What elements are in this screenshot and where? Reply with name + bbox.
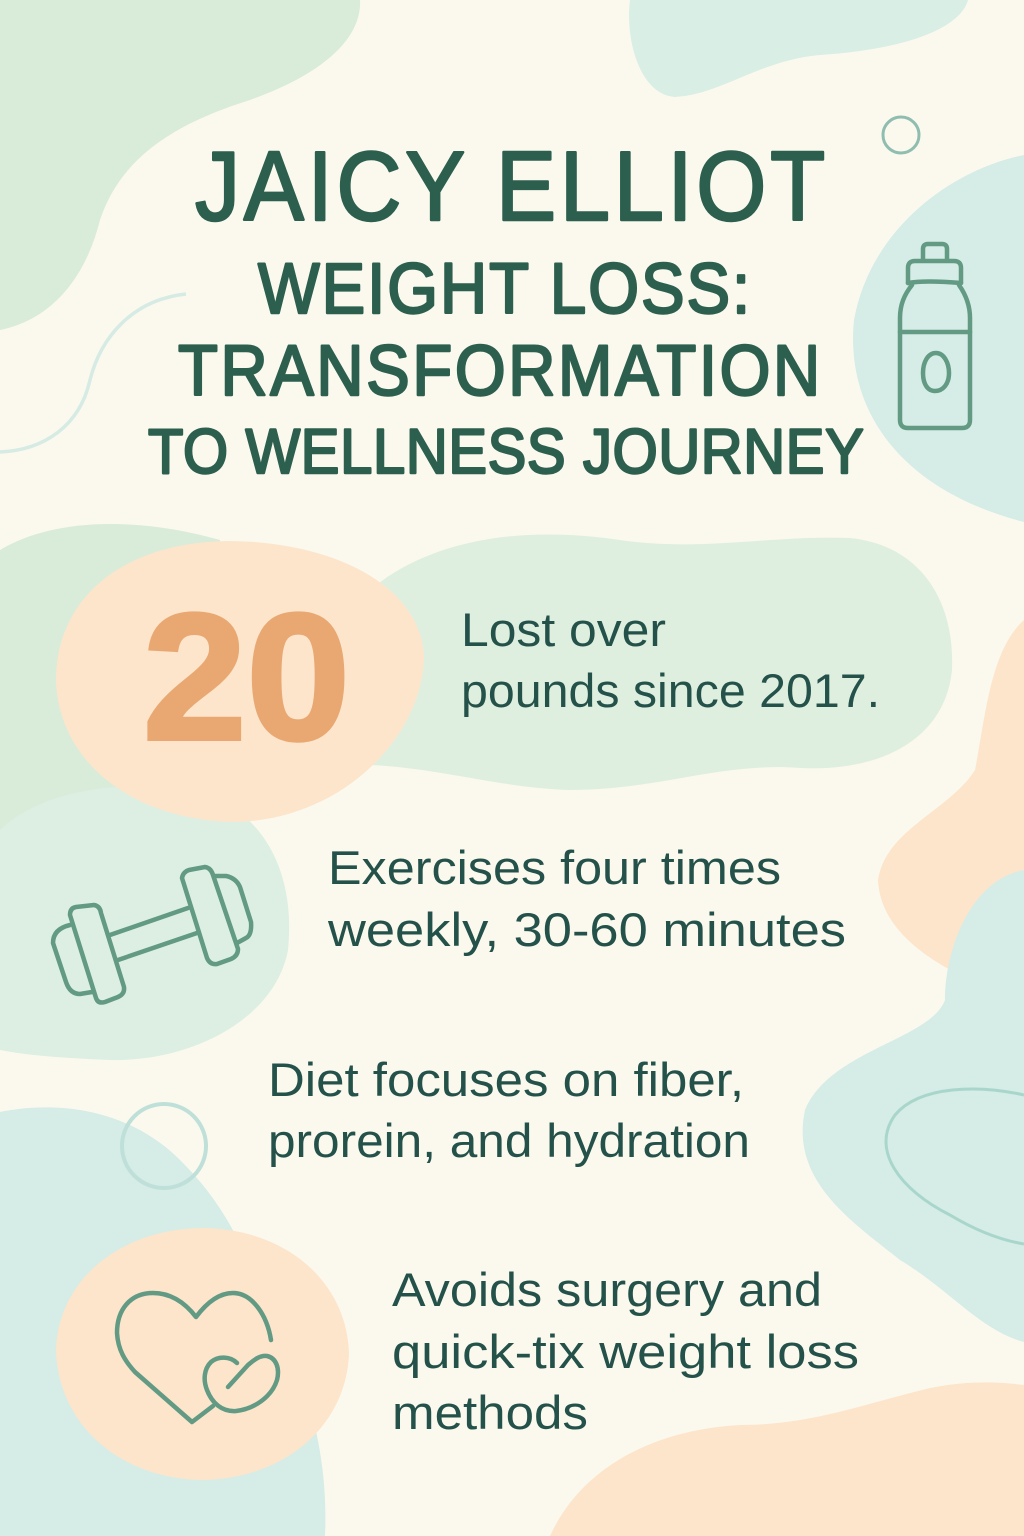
- icon: water bottle: [900, 244, 970, 428]
- background: left green blob at mid height: [0, 524, 260, 830]
- decorative curve top-left: [0, 294, 186, 452]
- fact text: [461, 603, 880, 717]
- peach circle with number: 20: [143, 577, 350, 778]
- background: bottom-left teal blob: [0, 1107, 325, 1536]
- fact 1: 20 pounds: [56, 541, 880, 822]
- title: [148, 132, 864, 487]
- fact 3: diet text: Diet focuses on fiber,: [268, 1053, 744, 1106]
- background: wide green band behind first fact: [370, 534, 952, 790]
- background: right teal blob behind bottle: [853, 155, 1024, 522]
- background: right peach blob: [878, 620, 1024, 980]
- fact 2: exercise text: [327, 841, 846, 956]
- fact 4: avoids surgery text: Avoids surgery and: [392, 1263, 822, 1316]
- title: TO WELLNESS JOURNEY: [148, 416, 864, 487]
- decorative loop right: [886, 1089, 1024, 1244]
- icon: dumbbell: [53, 867, 251, 1002]
- peach circle behind heart icon: [56, 1228, 349, 1480]
- fact 2: exercise text: Exercises four times: [328, 841, 781, 894]
- fact 4: avoids surgery text: [392, 1263, 859, 1439]
- fact text: Lost over: [461, 603, 666, 656]
- fact 4: avoids surgery text: methods: [392, 1386, 588, 1439]
- fact 3: diet text: [268, 1053, 750, 1167]
- background: bottom-right peach blob: [550, 1382, 1024, 1536]
- fact 3: diet text: prorein, and hydration: [268, 1114, 750, 1167]
- peach circle with number: [56, 541, 424, 822]
- title: TRANSFORMATION: [178, 332, 820, 411]
- background: top-left green blob: [0, 0, 360, 330]
- fact 2: exercise text: weekly, 30-60 minutes: [327, 903, 846, 956]
- decorative circle top-right: [883, 117, 919, 153]
- background: right lower teal blob: [803, 870, 1024, 1342]
- fact text: pounds since 2017.: [461, 664, 880, 717]
- background: top-right teal blob: [629, 0, 968, 97]
- icon: heart with pill: [117, 1293, 278, 1422]
- background: green blob behind dumbbell: [0, 786, 289, 1060]
- title: JAICY ELLIOT: [195, 132, 825, 241]
- title: WEIGHT LOSS:: [258, 250, 750, 329]
- fact 4: avoids surgery text: quick-tix weight loss: [392, 1325, 859, 1378]
- decorative circle lower-left: [122, 1104, 206, 1188]
